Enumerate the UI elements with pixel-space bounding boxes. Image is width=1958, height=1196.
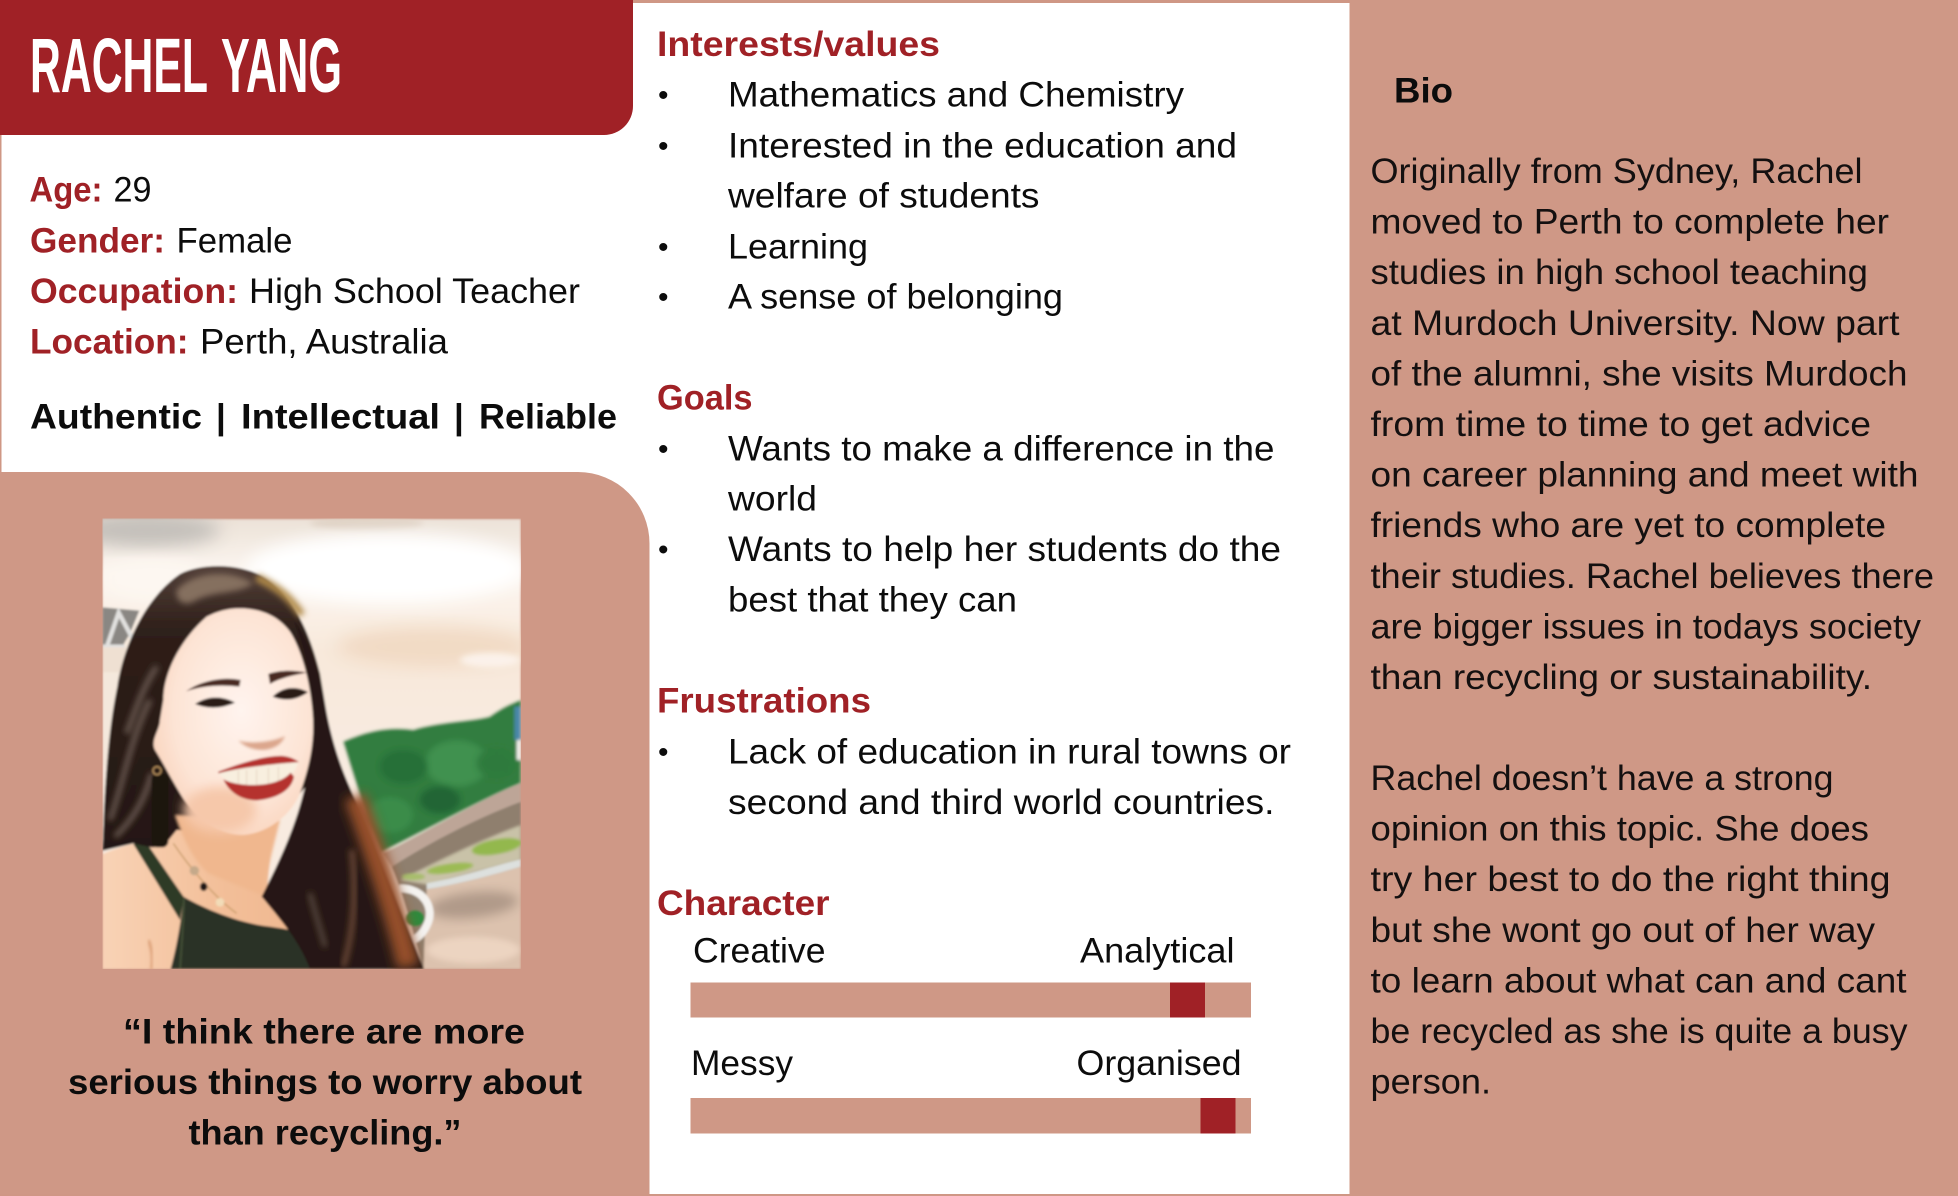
section: goals: •: [658, 433, 669, 466]
necklace: [173, 843, 237, 913]
sky: [73, 513, 530, 969]
background structure: [102, 606, 140, 671]
quote: [68, 1012, 582, 1152]
quote: “I think there are more: [123, 1012, 525, 1051]
bio paragraph one: from time to time to get advice: [1370, 405, 1871, 444]
demographics: Location:: [30, 322, 189, 362]
slider: messy to organised: [690, 1044, 1251, 1134]
section: interests and values: [657, 25, 1237, 317]
section: interests and values: Interested in the education and: [728, 126, 1237, 165]
bio paragraph one: friends who are yet to complete: [1370, 506, 1886, 545]
nose: [238, 736, 285, 750]
section: interests and values: welfare of students: [727, 177, 1040, 216]
demographics: 29: [114, 171, 152, 210]
eyebrows and eyes: [186, 671, 308, 708]
section: goals: Goals: [657, 379, 752, 418]
section: interests and values: A sense of belonging: [728, 278, 1063, 317]
section: goals: best that they can: [728, 581, 1017, 620]
bio paragraph one: at Murdoch University. Now part: [1370, 304, 1900, 343]
trees: [343, 700, 521, 852]
photo panel background: [0, 472, 650, 1194]
section: goals: Wants to make a difference in the: [728, 429, 1274, 468]
demographics: Perth, Australia: [200, 322, 449, 362]
dark green top: [132, 842, 312, 969]
face and neck: [154, 608, 313, 895]
demographics: High School Teacher: [249, 272, 580, 311]
bio paragraph one: studies in high school teaching: [1370, 253, 1868, 292]
arm crease: [148, 940, 152, 969]
bio paragraph two: try her best to do the right thing: [1370, 860, 1890, 899]
personality traits: |: [454, 398, 464, 436]
bio paragraph one: are bigger issues in todays society: [1370, 607, 1922, 646]
bio paragraph two: Rachel doesn’t have a strong: [1370, 759, 1834, 798]
bio paragraph one: their studies. Rachel believes there: [1370, 557, 1934, 596]
bio paragraph one: than recycling or sustainability.: [1370, 658, 1872, 697]
hair: [103, 566, 333, 851]
skin: shoulder and chest: [103, 817, 343, 969]
section: frustrations: Frustrations: [657, 682, 871, 721]
personality traits: Authentic: [30, 398, 202, 436]
slider: messy to organised: Organised: [1076, 1044, 1242, 1083]
bio paragraph two: opinion on this topic. She does: [1370, 810, 1869, 849]
slider: creative to analytical: [690, 931, 1251, 1018]
personality traits: Intellectual: [241, 398, 440, 436]
demographics: Age:: [30, 171, 102, 210]
demographics: [30, 171, 580, 362]
bio paragraph one: of the alumni, she visits Murdoch: [1370, 354, 1908, 393]
panel: bio: [1370, 72, 1934, 1102]
section: goals: Wants to help her students do the: [728, 530, 1281, 569]
photo: smiling woman: [73, 513, 530, 969]
title: YANG: [221, 23, 342, 109]
demographics: Gender:: [30, 221, 165, 260]
bio paragraph two: be recycled as she is quite a busy: [1370, 1012, 1908, 1051]
long hair right: [262, 620, 424, 969]
panel: bio background: [1350, 0, 1958, 1196]
panel: middle column: [657, 25, 1291, 1134]
panel: left profile: [0, 0, 650, 1194]
section: goals: •: [658, 534, 669, 566]
earring: [152, 767, 168, 847]
section: character: Character: [657, 884, 830, 923]
personality traits: Reliable: [479, 398, 617, 436]
demographics: Female: [176, 221, 292, 260]
section: interests and values: •: [658, 281, 669, 314]
section: frustrations: second and third world countries.: [728, 783, 1274, 822]
bio paragraph one: moved to Perth to complete her: [1370, 203, 1889, 242]
section: character: [657, 884, 1251, 1134]
title: RACHEL: [30, 23, 208, 109]
section: interests and values: Interests/values: [657, 25, 940, 64]
section: frustrations: [657, 682, 1291, 822]
bio paragraph two: but she wont go out of her way: [1370, 911, 1876, 950]
personality traits: |: [216, 398, 226, 436]
section: interests and values: Learning: [728, 227, 868, 266]
personality traits: [30, 398, 617, 436]
section: frustrations: Lack of education in rural towns or: [728, 732, 1291, 771]
bio paragraph one: on career planning and meet with: [1370, 456, 1918, 495]
bio paragraph two: person.: [1370, 1063, 1491, 1102]
section: interests and values: Mathematics and Chemistry: [728, 76, 1185, 115]
slider: creative to analytical: Analytical: [1080, 931, 1234, 970]
header banner: [0, 0, 633, 135]
river bank: [383, 783, 523, 969]
bio paragraph two: to learn about what can and cant: [1370, 961, 1907, 1000]
section: interests and values: •: [658, 79, 669, 112]
smile: [218, 756, 299, 800]
slider: creative to analytical: Creative: [693, 931, 826, 970]
section: frustrations: •: [658, 736, 669, 769]
quote: than recycling.”: [188, 1114, 462, 1152]
bio heading: Bio: [1394, 72, 1453, 111]
slider: messy to organised: Messy: [691, 1044, 793, 1083]
bio paragraph two: [1370, 759, 1908, 1102]
bio paragraph one: [1370, 152, 1934, 697]
section: goals: world: [727, 480, 817, 519]
section: interests and values: •: [658, 130, 669, 163]
demographics: Occupation:: [30, 272, 238, 311]
section: goals: [657, 379, 1281, 620]
section: interests and values: •: [658, 231, 669, 264]
bio paragraph one: Originally from Sydney, Rachel: [1370, 152, 1862, 191]
quote: serious things to worry about: [68, 1063, 582, 1102]
